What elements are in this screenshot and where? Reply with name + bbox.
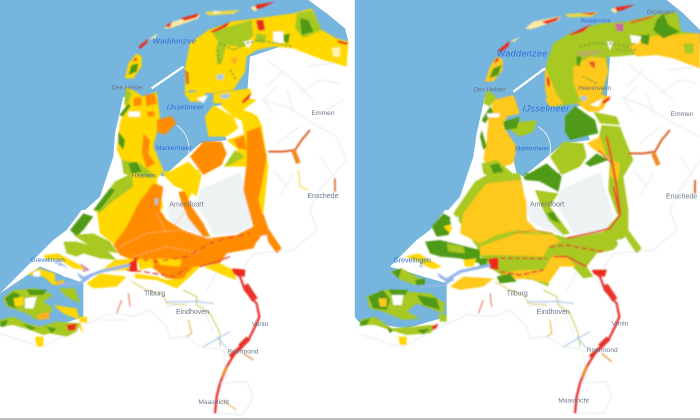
South yellow (503, 255, 577, 283)
Friesland and Groningen (185, 8, 348, 97)
bottom edge rule (0, 418, 700, 420)
Central lime base (453, 173, 642, 287)
right Afsluitdijk (513, 68, 545, 92)
Markermeer outline (177, 125, 189, 155)
Delta water (420, 265, 490, 287)
right map labels: Venlo (612, 320, 629, 327)
right map labels: Tilburg (507, 290, 528, 297)
panel: left map (0, 0, 348, 415)
South Holland north block (97, 173, 163, 253)
Flevoland east (190, 142, 227, 175)
right map labels (393, 10, 697, 405)
right map labels: Enschede (666, 194, 697, 201)
Flevoland east (550, 142, 587, 175)
pale area: Veluwe (197, 172, 253, 235)
streams (478, 282, 590, 348)
left map labels: Waddenzee (153, 36, 196, 45)
left map labels: Grevelingen (31, 257, 65, 264)
right map labels: Groningen (647, 10, 675, 16)
right map labels: Amersfoort (530, 202, 564, 209)
Friesland and Groningen base (545, 12, 700, 107)
left map labels: Tilburg (144, 290, 165, 297)
Twente streams (268, 130, 335, 192)
left map labels: Emmen (312, 110, 335, 117)
left map labels: IJsselmeer (167, 102, 204, 111)
right sea (355, 0, 700, 328)
right map labels: Waddenzee (497, 49, 548, 59)
Kop and south Friesland (185, 90, 207, 102)
right map labels: Grevelingen (393, 258, 431, 265)
left map labels: Venlo (252, 321, 269, 328)
North Holland (117, 87, 163, 180)
river lines and pale streets (127, 233, 250, 277)
right map labels: Emmen (671, 111, 694, 118)
Friesland speckles (217, 40, 293, 80)
right map labels: Roermond (587, 347, 618, 354)
Delta water (58, 263, 130, 285)
Flevoland south (523, 163, 562, 192)
Limburg Meuse river (215, 272, 259, 413)
left land colours (0, 2, 348, 415)
pale land boundaries (0, 60, 347, 415)
South Holland yellow (460, 180, 540, 243)
panel: right map (355, 0, 700, 413)
right land colours (358, 5, 700, 413)
right map labels: Heerenveen (578, 86, 611, 92)
Twente streams (628, 130, 695, 193)
Noordoostpolder (205, 105, 238, 137)
IJssel valley (597, 125, 633, 230)
right map labels: Eindhoven (537, 309, 570, 316)
right map labels: Den Helder (473, 86, 505, 93)
left map labels: Maastricht (198, 399, 229, 406)
Delta north (70, 213, 93, 237)
islands (125, 2, 275, 78)
Flevoland south (163, 162, 202, 197)
Kop and south Friesland (545, 95, 563, 107)
Central orange mass (113, 183, 282, 280)
Delta north (432, 213, 455, 237)
left map labels (31, 36, 339, 406)
left map labels: Enschede (307, 193, 339, 200)
left map labels: Haarlem (132, 173, 156, 180)
Noordoostpolder (565, 106, 598, 140)
Zeeland (0, 253, 87, 347)
right map labels: Maastricht (558, 398, 589, 405)
left map labels: Eindhoven (176, 309, 209, 316)
streams (117, 282, 230, 348)
right map labels: Waddenzee (581, 19, 611, 25)
left map labels: Den Helder (112, 84, 144, 91)
left map labels: Markermeer (156, 145, 193, 152)
pale area: Veluwe (557, 172, 613, 235)
islands (485, 5, 635, 82)
Limburg Meuse river (575, 272, 619, 413)
pale land boundaries (358, 63, 700, 413)
river lines (493, 187, 620, 275)
left map labels: Roermond (227, 348, 259, 355)
right map labels: IJsselmeer (523, 104, 570, 114)
North Holland (483, 95, 520, 170)
Gelderse Vallei strip (178, 192, 210, 237)
South of river yellows (137, 258, 154, 270)
white divider between maps (350, 0, 355, 420)
left map labels: Amersfoort (169, 202, 204, 209)
left sea (0, 0, 348, 328)
Middle band yellow (480, 233, 560, 257)
right map labels: Markermeer (515, 146, 549, 153)
Zeeland (360, 253, 447, 345)
Friesland speckles right (580, 43, 637, 83)
right Markermeer outline (538, 127, 551, 155)
IJssel valley (223, 133, 248, 167)
left coastal road Afsluitdijk (152, 67, 183, 88)
